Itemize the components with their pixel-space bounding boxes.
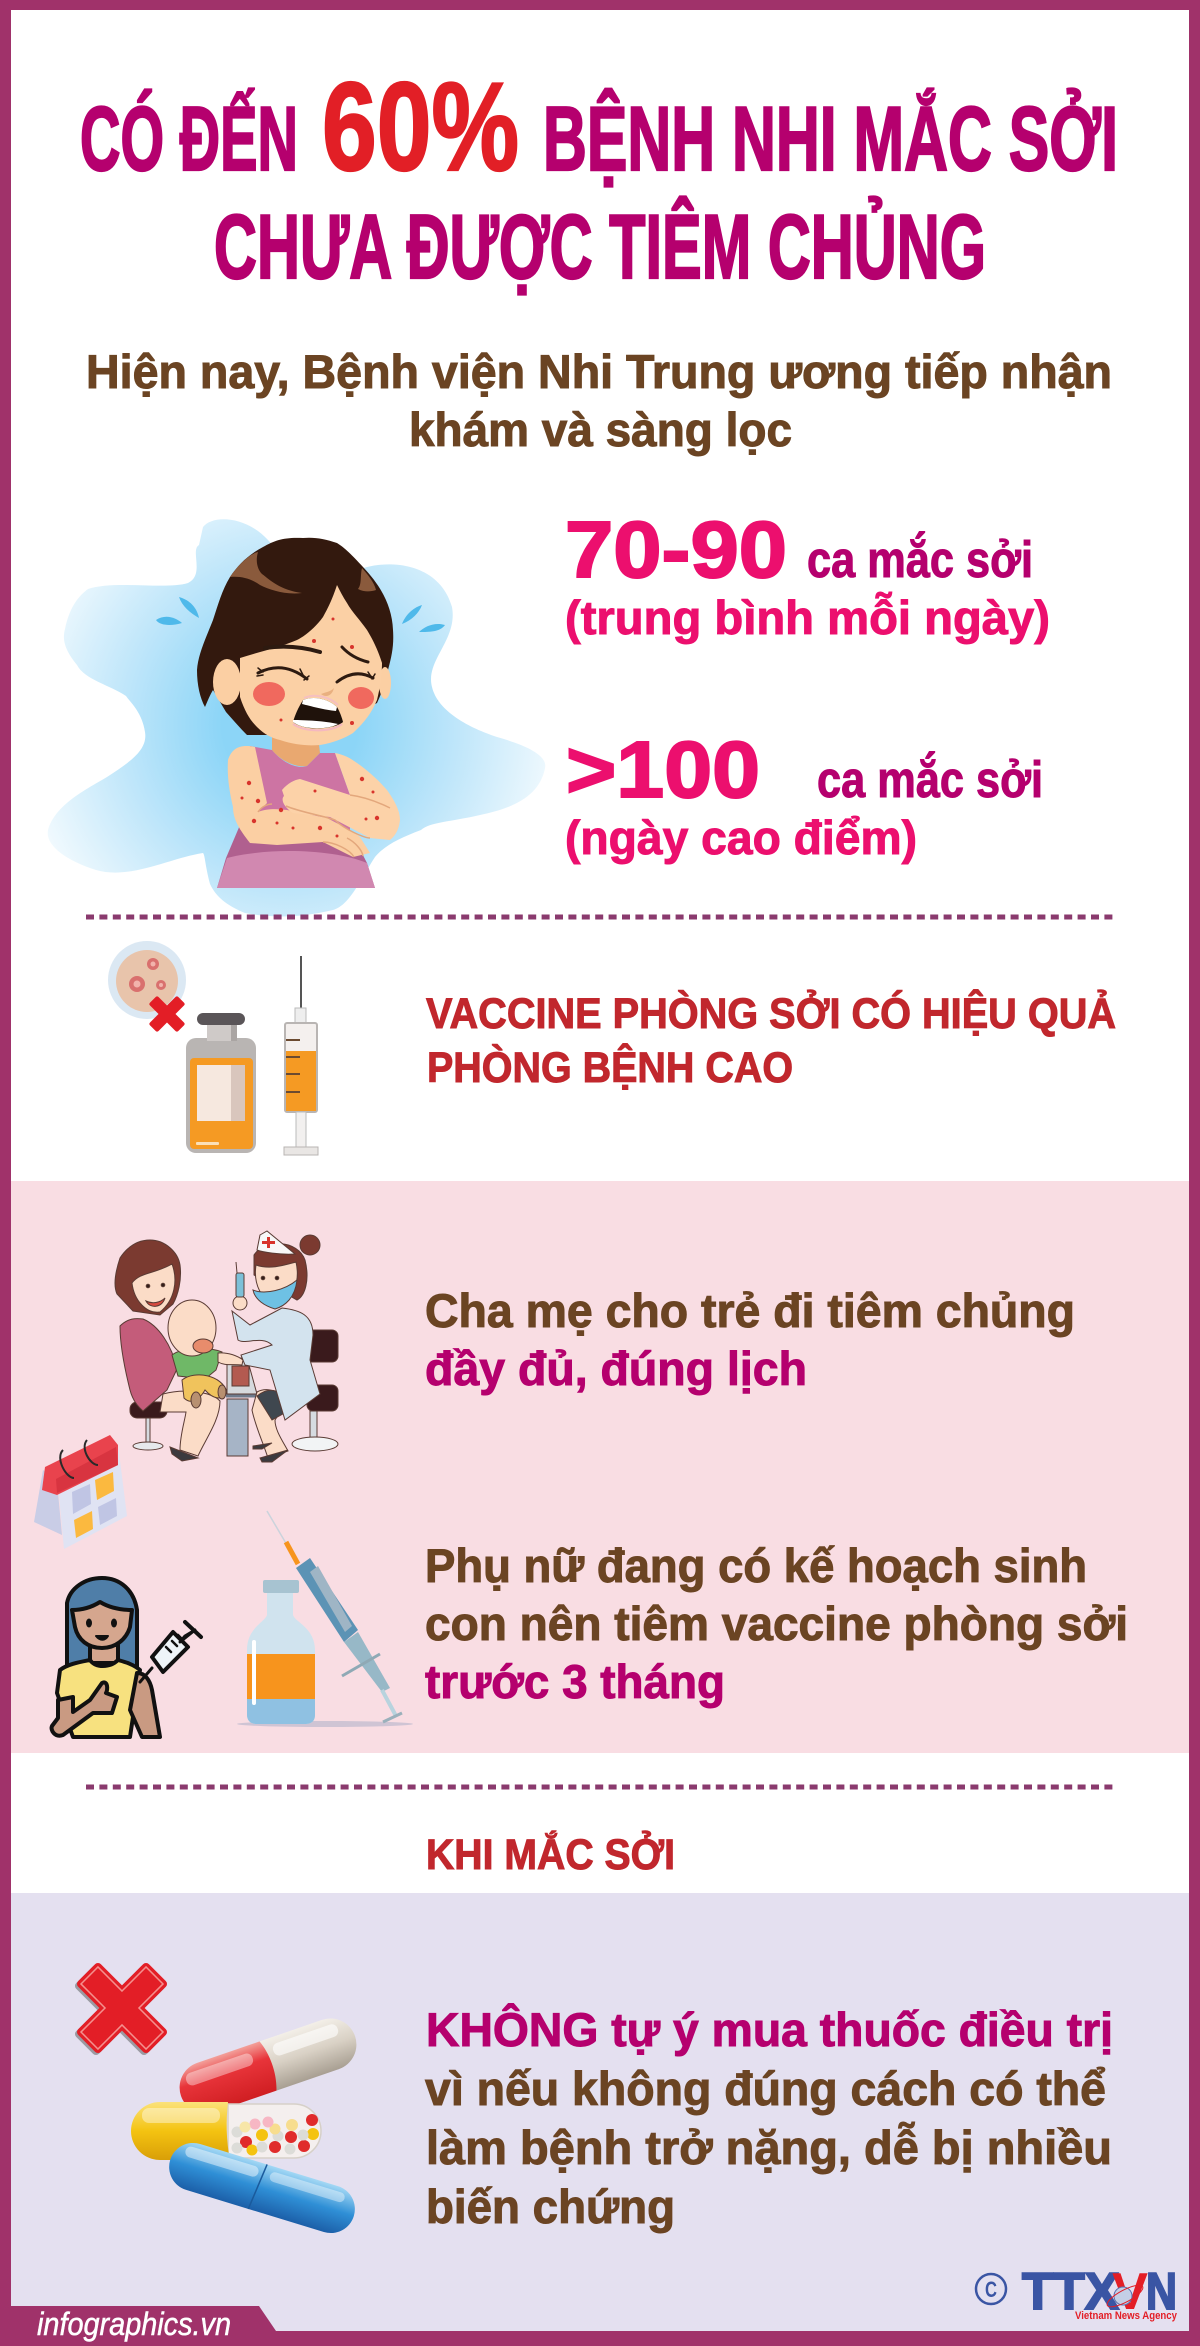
nurse head xyxy=(300,1235,320,1255)
table xyxy=(227,1358,257,1394)
panel: when infected background xyxy=(11,1893,1189,2331)
syringe xyxy=(152,1632,188,1672)
arms xyxy=(228,746,370,857)
heading: vaccine effectiveness xyxy=(426,989,1116,1092)
back hair xyxy=(197,538,393,735)
mother legs xyxy=(160,1391,220,1456)
icon: vial with syringe xyxy=(237,1511,413,1727)
text: parents vaccinate children: Cha mẹ cho trẻ đi tiêm chủng xyxy=(425,1284,1075,1337)
text: do not self-medicate xyxy=(425,2003,1113,2233)
right arm xyxy=(130,1673,160,1737)
face xyxy=(72,1602,132,1648)
crossing arm xyxy=(52,1682,117,1736)
shirt xyxy=(57,1660,140,1737)
footer: infographics.vn tab xyxy=(0,2306,1200,2346)
nurse chair xyxy=(306,1330,338,1362)
stat: over 100 cases on peak days: (ngày cao điểm) xyxy=(565,811,917,864)
hair highlights xyxy=(230,552,302,593)
icon: medicine capsules xyxy=(131,2011,363,2239)
yellow and clear capsule xyxy=(131,2102,321,2160)
title: 60% xyxy=(322,58,519,197)
title xyxy=(80,58,1118,298)
logo: TTXVN Vietnam News Agency: V xyxy=(1112,2263,1148,2321)
intro text: khám và sàng lọc xyxy=(409,403,792,456)
intro text: Hiện nay, Bệnh viện Nhi Trung ương tiếp nhận xyxy=(86,345,1112,398)
tears xyxy=(156,597,445,632)
logo: TTXVN Vietnam News Agency: N xyxy=(1146,2263,1177,2321)
text: do not self-medicate: biến chứng xyxy=(426,2180,675,2233)
text: do not self-medicate: vì nếu không đúng cách có thể xyxy=(425,2062,1106,2115)
heading: when infected: KHI MẮC SỞI xyxy=(426,1830,675,1879)
footer: infographics.vn tab: infographics.vn xyxy=(37,2306,231,2342)
nose xyxy=(321,688,334,696)
rash dots xyxy=(240,618,379,838)
neck xyxy=(272,736,320,766)
logo: TTXVN Vietnam News Agency: TTX xyxy=(1022,2263,1119,2321)
hair xyxy=(67,1578,137,1667)
logo: TTXVN Vietnam News Agency: C xyxy=(985,2277,997,2302)
upper dress xyxy=(240,746,350,830)
title: CÓ ĐẾN xyxy=(80,88,298,190)
ears xyxy=(213,659,241,705)
neck xyxy=(90,1645,118,1663)
rash circle xyxy=(108,941,186,1019)
closed eyes and eyebrows xyxy=(257,647,375,682)
icon: red cross xyxy=(49,1937,193,2081)
lower dress xyxy=(217,825,375,888)
syringe xyxy=(300,956,302,1010)
stat: over 100 cases on peak days: ca mắc sởi xyxy=(817,750,1043,808)
logo: TTXVN Vietnam News Agency: Vietnam News Agency xyxy=(1075,2310,1178,2322)
cheeks xyxy=(253,682,285,706)
text: women planning pregnancy: trước 3 tháng xyxy=(425,1655,725,1708)
nurse legs xyxy=(252,1390,288,1458)
heading: vaccine effectiveness: PHÒNG BỆNH CAO xyxy=(427,1043,793,1092)
stat: over 100 cases on peak days xyxy=(565,725,1043,864)
mother stool xyxy=(130,1402,167,1418)
icon: vaccine vial, syringe and rash xyxy=(108,941,318,1155)
red and beige capsule xyxy=(173,2011,363,2121)
nurse hand and syringe xyxy=(233,1296,247,1310)
nurse coat xyxy=(232,1308,320,1420)
logo: TTXVN Vietnam News Agency xyxy=(976,2263,1178,2322)
syringe xyxy=(267,1511,402,1722)
baby xyxy=(172,1349,222,1379)
text: women planning pregnancy xyxy=(425,1539,1128,1708)
illustration: sick child with measles rash xyxy=(48,519,545,916)
stat: 70-90 cases per day: 70-90 xyxy=(565,505,787,594)
text: parents vaccinate children: đầy đủ, đúng lịch xyxy=(425,1342,807,1395)
text: parents vaccinate children xyxy=(425,1284,1075,1395)
text: do not self-medicate: KHÔNG tự ý mua thuốc điều trị xyxy=(426,2003,1113,2056)
stat: over 100 cases on peak days: >100 xyxy=(566,725,760,814)
icon: calendar xyxy=(34,1435,127,1549)
intro text xyxy=(86,345,1112,456)
text: women planning pregnancy: con nên tiêm vaccine phòng sởi xyxy=(425,1597,1128,1650)
red cross xyxy=(139,986,195,1042)
stat: 70-90 cases per day: ca mắc sởi xyxy=(807,530,1033,588)
heading: vaccine effectiveness: VACCINE PHÒNG SỞI CÓ HIỆU QUẢ xyxy=(426,989,1116,1038)
open mouth xyxy=(293,698,343,728)
illustration: mother, baby and nurse at vaccination xyxy=(115,1231,338,1462)
vial xyxy=(186,1038,256,1153)
mother body xyxy=(120,1319,177,1411)
mother head and hair xyxy=(115,1240,181,1315)
text: women planning pregnancy: Phụ nữ đang có kế hoạch sinh xyxy=(425,1539,1087,1592)
stat: 70-90 cases per day: (trung bình mỗi ngày) xyxy=(565,591,1050,644)
face xyxy=(240,585,382,745)
stat: 70-90 cases per day xyxy=(565,505,1050,644)
icon: woman receiving a vaccine xyxy=(52,1578,201,1737)
panel: vaccination advice background xyxy=(11,1181,1189,1753)
blue capsule xyxy=(163,2137,361,2239)
text: do not self-medicate: làm bệnh trở nặng, dễ bị nhiều xyxy=(426,2121,1112,2174)
